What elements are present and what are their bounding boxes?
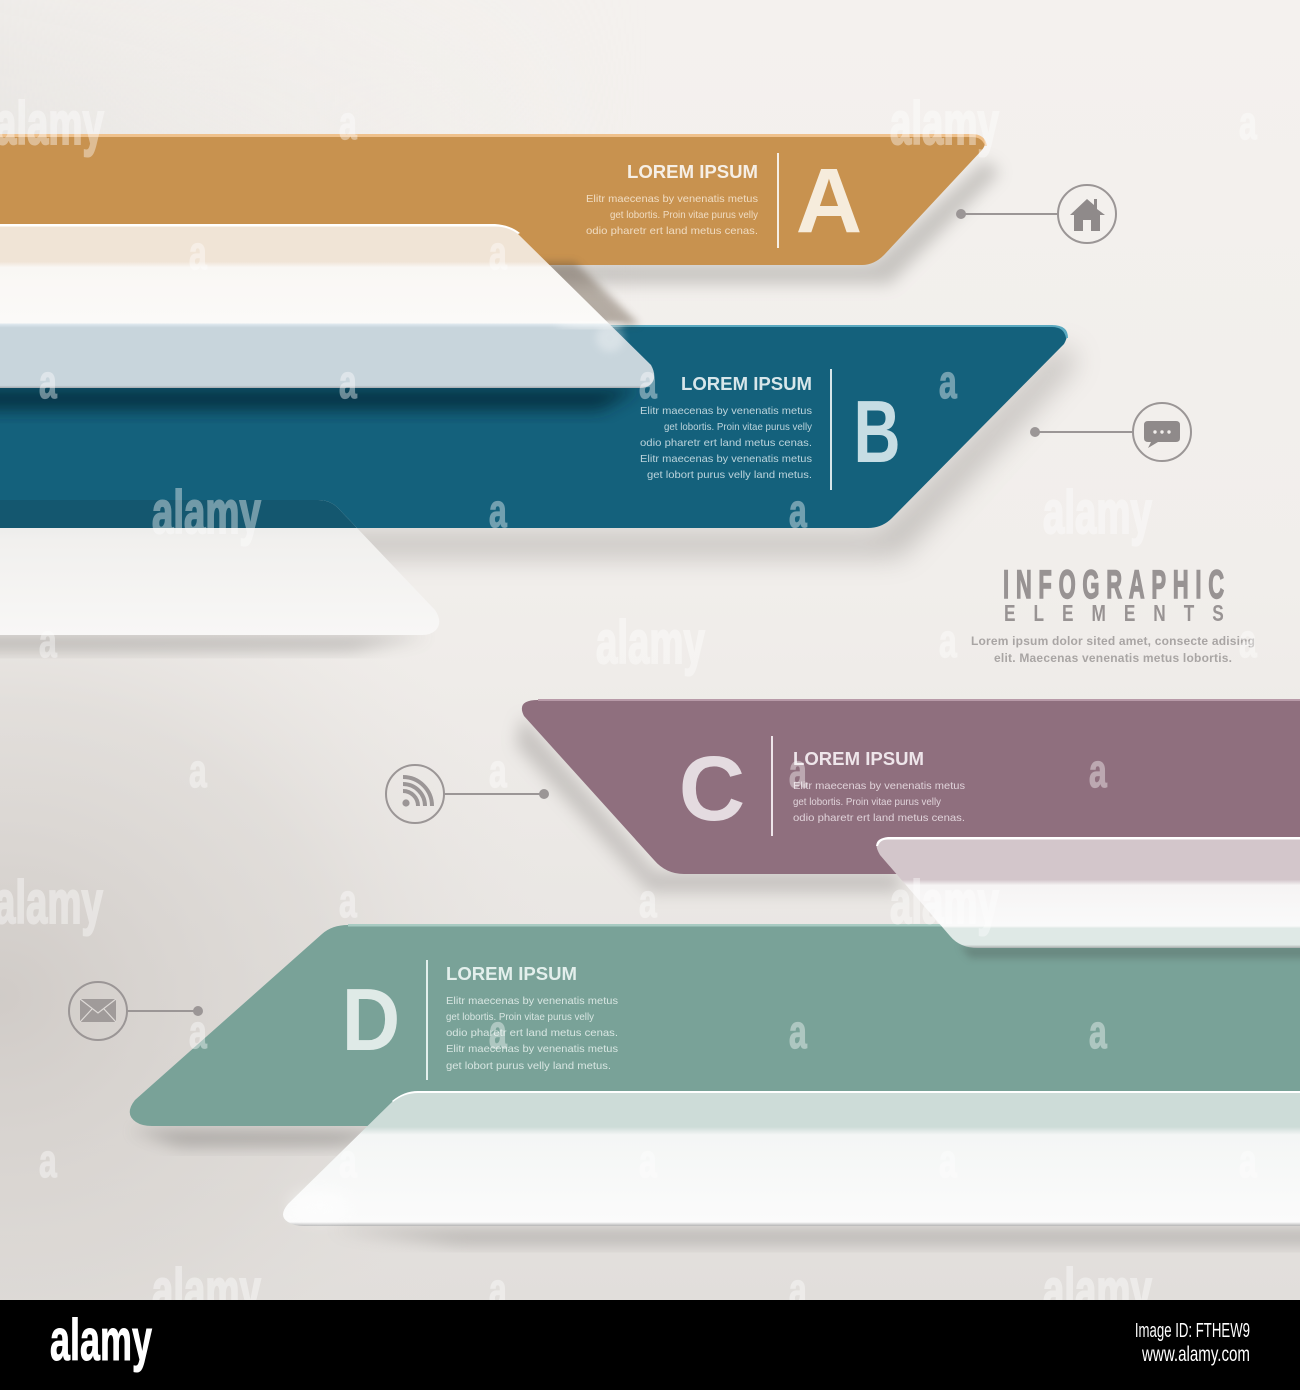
panel B: teal band	[0, 325, 1078, 556]
watermarks: alamy	[1043, 1256, 1152, 1324]
glass strip of band D	[283, 1091, 1300, 1244]
watermarks: a	[639, 875, 657, 928]
watermarks: a	[39, 356, 57, 409]
watermarks: a	[339, 875, 357, 928]
watermarks: a	[339, 1135, 357, 1188]
watermarks: a	[39, 615, 57, 668]
watermarks: a	[1089, 745, 1107, 798]
heading D: LOREM IPSUM	[446, 964, 577, 984]
text block D: get lobortis. Proin vitae purus velly	[446, 1011, 595, 1023]
title: elements: ELEMENTS	[1004, 602, 1224, 627]
watermarks: a	[1089, 1006, 1107, 1059]
lower glass strip of band B	[0, 500, 439, 650]
text block B: odio pharetr ert land metus cenas.	[640, 437, 812, 449]
band B highlight	[610, 325, 1068, 338]
text block C: get lobortis. Proin vitae purus velly	[793, 796, 942, 808]
shadow over band A	[530, 262, 640, 325]
connector B with chat icon	[1030, 403, 1191, 461]
watermarks: a	[39, 1135, 57, 1188]
text block B: Elitr maecenas by venenatis metus	[640, 405, 812, 417]
title description: Lorem ipsum dolor sited amet, consecte adising	[971, 634, 1255, 648]
text block C: odio pharetr ert land metus cenas.	[793, 812, 965, 824]
watermarks: a	[489, 1264, 507, 1317]
icon: speech bubble	[1144, 421, 1180, 448]
band C highlight	[538, 699, 1300, 701]
watermarks: a	[939, 1135, 957, 1188]
watermarks: a	[639, 356, 657, 409]
text block D: get lobort purus velly land metus.	[446, 1060, 611, 1072]
watermarks: a	[939, 615, 957, 668]
glass strip over band A and B	[0, 224, 654, 410]
watermarks: a	[339, 97, 357, 150]
watermarks: a	[339, 356, 357, 409]
watermarks: alamy	[152, 478, 261, 546]
connector D with mail icon	[69, 982, 203, 1040]
shadow over band B	[0, 388, 640, 410]
text block A: odio pharetr ert land metus cenas.	[586, 225, 758, 237]
text block A: get lobortis. Proin vitae purus velly	[610, 209, 759, 221]
text block B: Elitr maecenas by venenatis metus	[640, 453, 812, 465]
watermarks: a	[939, 356, 957, 409]
band D highlight	[348, 924, 1300, 926]
text block D: Elitr maecenas by venenatis metus	[446, 995, 618, 1007]
band B shape	[0, 326, 1067, 528]
band A shape	[0, 136, 985, 265]
image id: Image ID: FTHEW9	[1135, 1319, 1250, 1342]
connector C with rss icon	[386, 765, 549, 823]
text block B	[640, 405, 813, 481]
heading C: LOREM IPSUM	[793, 749, 924, 769]
text block B: get lobortis. Proin vitae purus velly	[664, 421, 813, 433]
letter A: A	[796, 150, 862, 252]
panel D: green band	[130, 924, 1300, 1146]
text block C	[793, 780, 965, 824]
website: www.alamy.com	[1141, 1341, 1250, 1366]
text block D: Elitr maecenas by venenatis metus	[446, 1043, 618, 1055]
icon: envelope	[80, 999, 116, 1022]
band D shape	[130, 925, 1300, 1126]
text block A: Elitr maecenas by venenatis metus	[586, 193, 758, 205]
connector A with home icon	[956, 185, 1116, 243]
text block C: Elitr maecenas by venenatis metus	[793, 780, 965, 792]
icon: rss	[402, 777, 432, 807]
watermarks: a	[789, 1264, 807, 1317]
text block A	[586, 193, 759, 237]
panel A: orange band	[0, 134, 1000, 284]
title description: elit. Maecenas venenatis metus lobortis.	[994, 651, 1232, 665]
watermarks: a	[1239, 97, 1257, 150]
watermarks: a	[1239, 1135, 1257, 1188]
watermarks: alamy	[890, 89, 999, 157]
watermarks: a	[489, 745, 507, 798]
icon: home	[1070, 199, 1105, 231]
letter B: B	[853, 384, 901, 481]
watermarks: a	[789, 1006, 807, 1059]
panel C: mauve band	[516, 699, 1300, 892]
watermarks: a	[189, 745, 207, 798]
watermarks: a	[189, 227, 207, 280]
watermarks: a	[639, 1135, 657, 1188]
band C shape	[522, 700, 1300, 874]
title description	[971, 634, 1255, 665]
heading B: LOREM IPSUM	[681, 374, 812, 394]
band A top highlight	[0, 134, 987, 146]
watermarks: a	[789, 485, 807, 538]
text block D	[446, 995, 618, 1072]
watermarks: a	[489, 485, 507, 538]
watermarks: a	[489, 227, 507, 280]
watermarks: a	[1239, 615, 1257, 668]
watermarks: alamy	[890, 868, 999, 936]
title: infographic: INFOGRAPHIC	[1003, 562, 1224, 607]
watermarks: a	[789, 745, 807, 798]
text block D: odio pharetr ert land metus cenas.	[446, 1027, 618, 1039]
watermarks: alamy	[596, 608, 705, 676]
letter D: D	[342, 970, 400, 1069]
watermarks: a	[189, 1006, 207, 1059]
watermarks: a	[489, 1006, 507, 1059]
watermarks: alamy	[1043, 478, 1152, 546]
letter C: C	[679, 738, 745, 840]
text block B: get lobort purus velly land metus.	[647, 469, 812, 481]
title block	[971, 562, 1255, 665]
watermarks: alamy	[152, 1256, 261, 1324]
glass strip of band C	[876, 837, 1300, 958]
heading A: LOREM IPSUM	[627, 162, 758, 182]
footer bar	[0, 1300, 1300, 1390]
footer logo: alamy	[50, 1308, 152, 1373]
